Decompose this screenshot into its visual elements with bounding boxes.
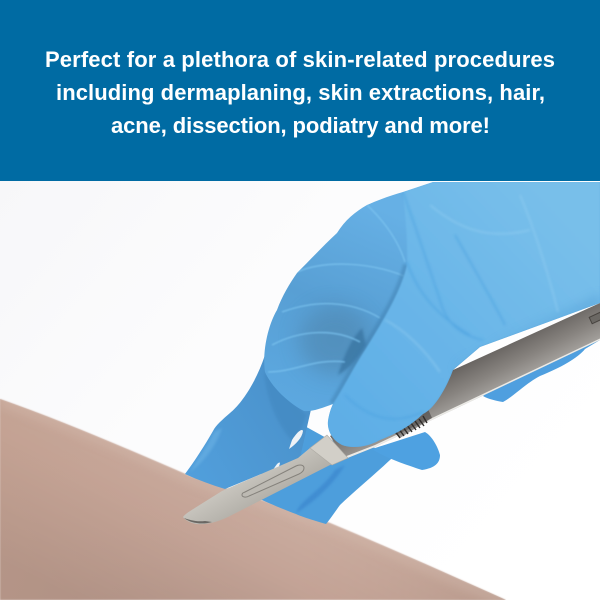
white corner at lower right [585, 553, 600, 600]
glove: back flap under handle [483, 340, 600, 402]
curled fingers [250, 180, 600, 460]
palm wrinkles [403, 193, 505, 340]
glove: flap below thumb [372, 432, 440, 470]
palm and thumb [328, 182, 600, 447]
blade shoulder [310, 435, 348, 465]
finger creases [268, 205, 405, 372]
headline text: acne, dissection, podiatry and more! [111, 113, 490, 138]
blade edge [184, 518, 212, 523]
headline text [45, 47, 555, 138]
shadow where palm overlaps fingers [333, 265, 407, 404]
glove: hand and thumb [250, 180, 600, 460]
handle engraving [589, 312, 600, 324]
blade slot [242, 465, 304, 497]
headline text: Perfect for a plethora of skin-related procedures [45, 47, 555, 72]
scalpel handle [330, 303, 600, 459]
curled finger shading [299, 306, 371, 375]
photo background [0, 181, 600, 600]
header banner [0, 0, 600, 181]
headline text: including dermaplaning, skin extractions, hair, [56, 80, 545, 105]
glove: lower finger behind blade [258, 424, 398, 524]
knurled grip [392, 409, 432, 438]
gaps between fingers [272, 430, 303, 475]
palm highlights [385, 195, 558, 372]
scalpel blade [183, 435, 348, 524]
glove: finger left of blade [185, 355, 312, 489]
palm shadow above handle [550, 298, 599, 322]
arm [0, 399, 506, 600]
